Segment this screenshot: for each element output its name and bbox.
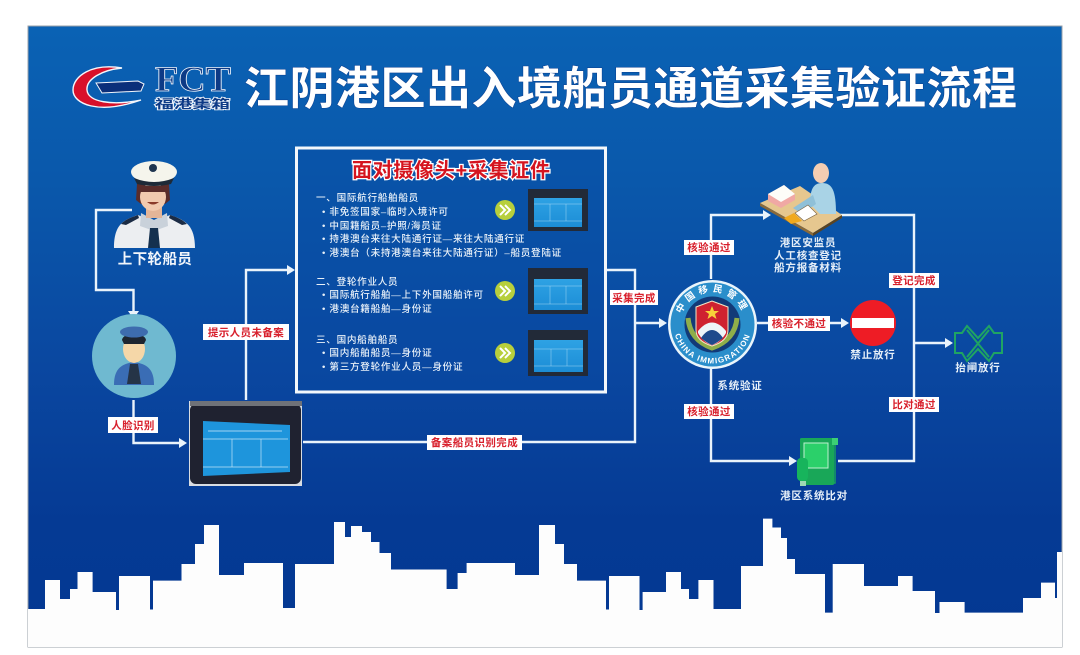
emblem: China Immigration: CHINA IMMIGRATION <box>676 334 750 364</box>
caption: gate release: 抬闸放行 <box>955 361 1001 374</box>
screen thumbnail 3 <box>528 330 588 376</box>
section 1 text: • 中国籍船员–护照/海员证 <box>322 220 442 232</box>
section 1 text: • 港澳台（未持港澳台来往大陆通行证）–船员登陆证 <box>322 247 562 259</box>
logo ship <box>96 81 144 93</box>
icon: security officer at desk <box>760 163 842 236</box>
section 3 text <box>316 334 463 373</box>
panel: face camera and document capture <box>296 148 606 392</box>
section 3 text: • 国内船舶船员—身份证 <box>322 347 432 359</box>
label: face recognition: 人脸识别 <box>111 419 155 432</box>
section 2 text: • 国际航行船舶—上下外国船舶许可 <box>322 289 484 301</box>
caption: system verification: 系统验证 <box>717 379 763 392</box>
caption: entry prohibited: 禁止放行 <box>850 348 896 361</box>
caption: security officer <box>774 236 842 274</box>
section 2 text <box>316 276 484 315</box>
section 2 text: 二、登轮作业人员 <box>316 276 398 288</box>
caption: boarding crew: 上下轮船员 <box>118 250 192 268</box>
label: registration complete <box>889 273 939 288</box>
section 1 text: • 非免签国家–临时入境许可 <box>322 206 449 218</box>
logo crescent <box>73 67 141 107</box>
icon: face recognition guard <box>92 314 176 398</box>
label: verification passed lower: 核验通过 <box>687 405 731 418</box>
section 3 text: 三、国内船舶船员 <box>316 334 398 346</box>
section 1 text: 一、国际航行船舶船员 <box>316 192 419 204</box>
caption: port system comparison: 港区系统比对 <box>780 489 848 502</box>
caption: security officer: 船方报备材料 <box>774 261 842 274</box>
label: verification passed upper <box>684 240 734 255</box>
label: verification failed: 核验不通过 <box>772 317 826 330</box>
icon: green arrow 1 <box>495 200 515 220</box>
label: not registered prompt <box>203 324 289 340</box>
label: face recognition <box>108 417 158 433</box>
icon: green arrow 2 <box>495 281 515 301</box>
skyline <box>28 519 1062 647</box>
label: comparison passed: 比对通过 <box>892 398 936 411</box>
flow connectors <box>96 210 953 466</box>
label: registered crew recognized: 备案船员识别完成 <box>431 436 518 449</box>
label: verification passed upper: 核验通过 <box>687 241 731 254</box>
screen thumbnail 2 <box>528 268 588 314</box>
section 3 text: • 第三方登轮作业人员—身份证 <box>322 361 463 373</box>
section 1 text <box>316 192 562 259</box>
section 1 text: • 持港澳台来往大陆通行证—来往大陆通行证 <box>322 233 525 245</box>
logo Chinese name: 福港集箱 <box>155 96 230 111</box>
icon: port system comparison device <box>797 438 838 486</box>
tablet photo <box>189 401 302 486</box>
icon: ship officer <box>114 161 195 248</box>
emblem: China Immigration: 中国移民管理 <box>676 284 748 312</box>
emblem: China Immigration <box>668 280 757 369</box>
label: verification passed lower <box>684 404 734 419</box>
panel heading: 面对摄像头+采集证件 <box>352 159 550 182</box>
icon: green arrow 3 <box>495 343 515 363</box>
label: registration complete: 登记完成 <box>892 274 936 287</box>
caption: security officer: 港区安监员 <box>780 236 836 249</box>
label: capture complete: 采集完成 <box>612 292 656 304</box>
caption: security officer: 人工核查登记 <box>774 249 842 262</box>
label: not registered prompt: 提示人员未备案 <box>208 326 284 339</box>
screen thumbnail 1 <box>528 189 588 231</box>
title: 江阴港区出入境船员通道采集验证流程 <box>244 63 1017 114</box>
icon: no entry <box>850 300 896 346</box>
icon: gate release <box>955 326 1002 361</box>
logo <box>73 59 231 111</box>
section 2 text: • 港澳台籍船舶—身份证 <box>322 303 432 315</box>
logo FCT: FCT <box>155 59 231 99</box>
label: comparison passed <box>889 397 939 412</box>
